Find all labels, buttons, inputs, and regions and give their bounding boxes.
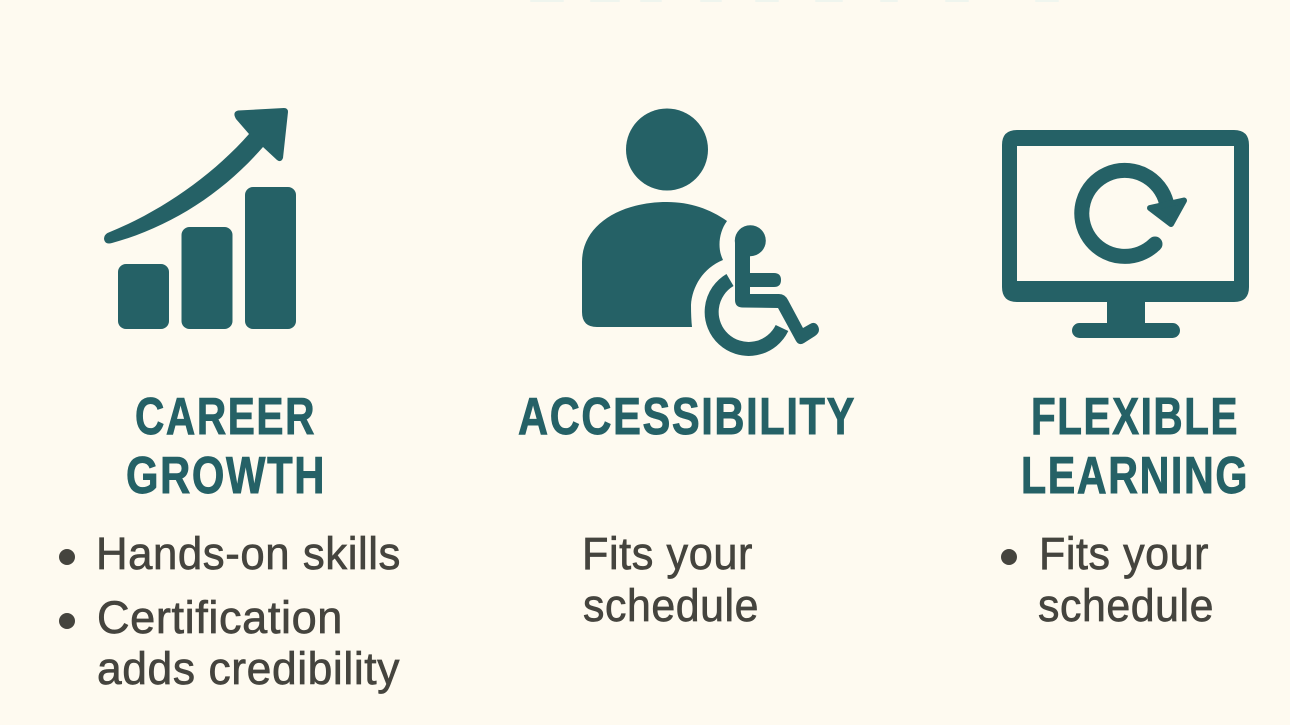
text: fits your schedule [582, 528, 759, 631]
bullet list: career growth: Hands-on skills [96, 528, 401, 579]
icon: monitor with circular arrow [1002, 130, 1249, 338]
bullet list: career growth [59, 528, 401, 694]
icon: person with wheelchair symbol [582, 108, 819, 349]
bullet list: flexible learning: Fits your [1039, 528, 1209, 579]
heading: career growth: CAREER [135, 388, 316, 446]
heading: career growth [126, 388, 326, 505]
panel: flexible learning [1001, 130, 1249, 631]
text: fits your schedule: schedule [583, 580, 759, 631]
bullet list: flexible learning [1001, 528, 1214, 631]
bullet list: flexible learning: schedule [1038, 580, 1214, 631]
panel: career growth [59, 108, 401, 694]
bullet list: career growth: adds credibility [97, 643, 400, 694]
text: fits your schedule: Fits your [582, 528, 753, 579]
heading: career growth: GROWTH [126, 447, 326, 505]
icon: rising bar chart with arrow [104, 108, 296, 329]
heading: accessibility: ACCESSIBILITY [518, 388, 856, 446]
heading: flexible learning [1021, 388, 1249, 505]
bullet list: career growth: Certification [97, 592, 343, 643]
cropped title remnant at top edge [530, 0, 1059, 2]
panel: accessibility [518, 108, 856, 631]
